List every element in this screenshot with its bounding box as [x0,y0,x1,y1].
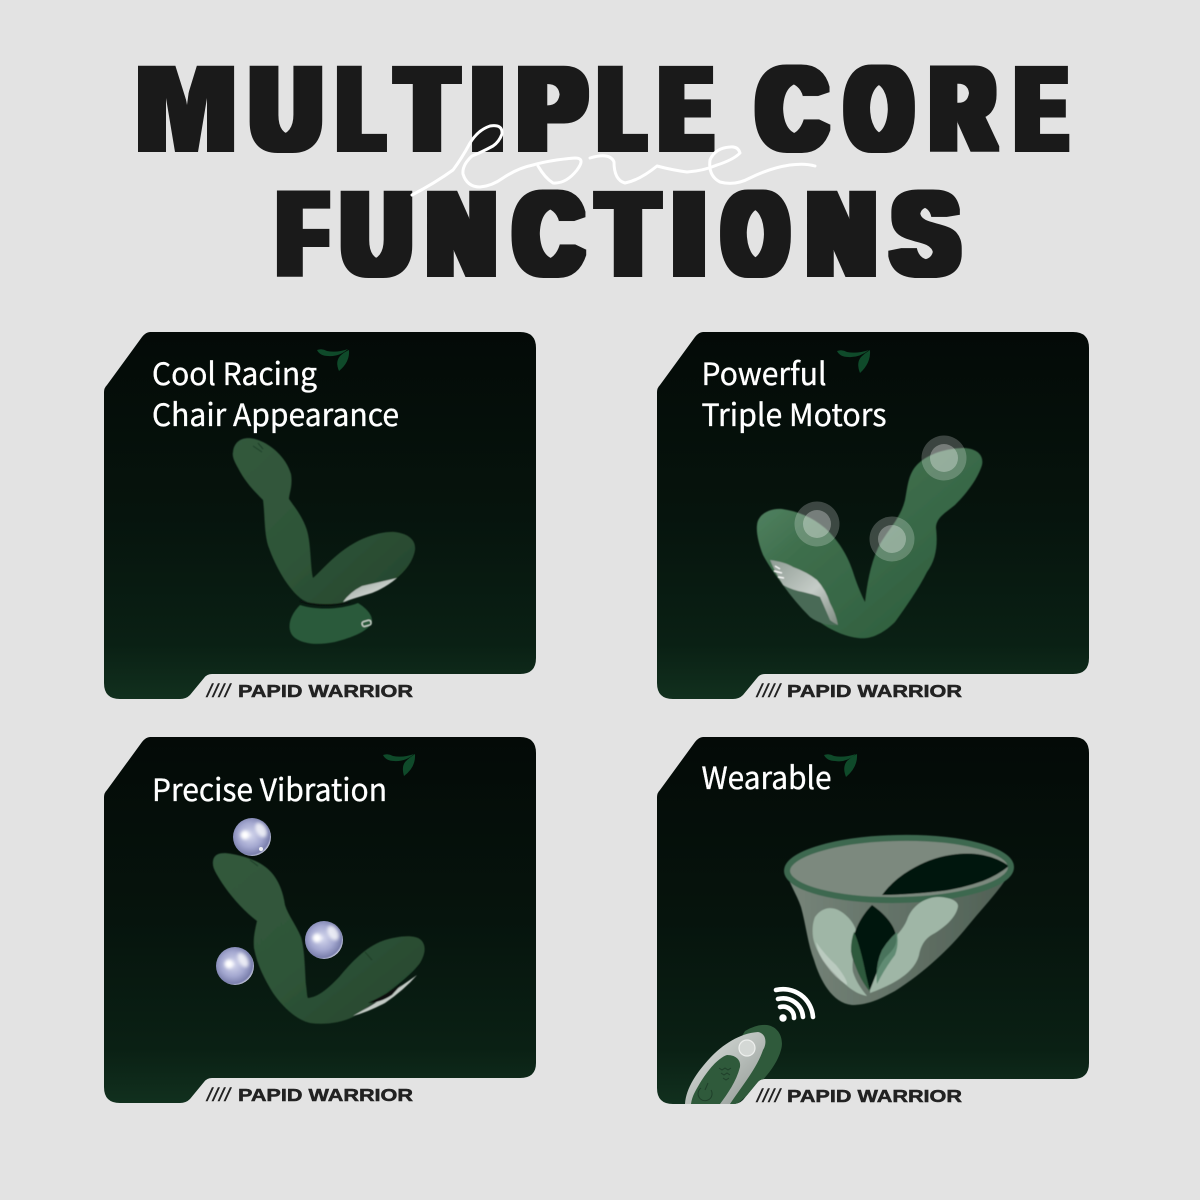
script word: love [412,126,815,195]
motor markers [794,436,966,562]
title: N [428,168,495,300]
brand label [755,681,962,701]
title: U [342,168,410,300]
panel: precise vibration [104,737,536,1105]
title: T [398,44,456,176]
heading: Precise Vibration [152,765,387,810]
brand label: PAPID WARRIOR [238,1085,413,1105]
icon: leaf [837,350,870,373]
card background [104,332,536,699]
brand label: //// [755,1086,782,1106]
heading: Wearable [702,753,832,798]
title: F [279,168,326,300]
brand label: PAPID WARRIOR [787,1086,962,1106]
brand label: PAPID WARRIOR [787,681,962,701]
card background [657,737,1089,1104]
title: O [847,44,911,176]
title [138,44,1065,300]
icon: leaf [317,349,349,371]
title: L [601,44,643,176]
heading: Chair Appearance [152,390,399,435]
panel: powerful triple motors [657,332,1089,701]
panel: wearable [657,737,1089,1106]
product: device with motors [757,448,982,638]
product: sheer wearable with device [785,836,1012,1005]
brand label: PAPID WARRIOR [238,681,413,701]
title: N [808,168,875,300]
title: S [893,168,958,300]
title: C [515,168,581,300]
card background [657,332,1089,699]
title: E [1018,44,1065,176]
vibration pearls [216,818,343,985]
title: M [138,44,234,176]
title: T [600,168,656,300]
heading: Triple Motors [702,390,886,435]
panel: cool racing chair appearance [104,332,536,701]
title: O [724,168,787,300]
title: I [472,44,503,176]
title: P [519,44,585,176]
brand label: //// [755,681,782,701]
brand label: //// [205,1085,232,1105]
heading: Cool Racing [152,349,317,394]
title: U [251,44,321,176]
heading: Powerful [702,349,826,394]
title: C [758,44,826,176]
brand label [205,681,413,701]
title: L [340,44,382,176]
product: device [213,853,425,1024]
brand label: //// [205,681,232,701]
title: I [673,168,705,300]
title: E [662,44,710,176]
icon: wireless signal [776,989,813,1022]
icon: leaf [383,754,415,776]
brand label [205,1085,413,1105]
product: device on stand [233,438,415,644]
icon: leaf [824,754,857,777]
card background [104,737,536,1103]
title: R [932,44,994,176]
remote control [685,1025,782,1104]
brand label [755,1086,962,1106]
